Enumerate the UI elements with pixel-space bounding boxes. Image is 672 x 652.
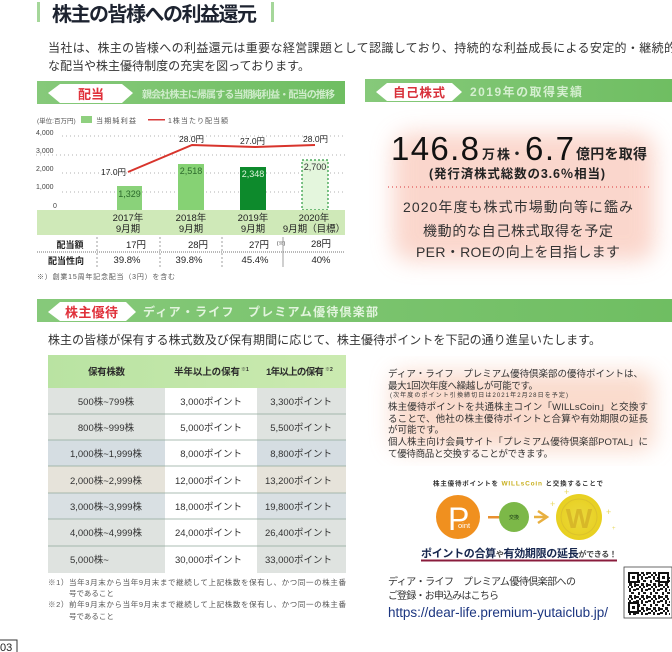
table rows: 3,000株~3,999株 bbox=[70, 501, 143, 513]
table rows: 5,000ポイント bbox=[180, 423, 242, 434]
table header: 保有株数 bbox=[88, 366, 125, 378]
panel: shareholder benefit header bbox=[37, 299, 672, 322]
icon: WILLs coin: W bbox=[566, 503, 593, 534]
headline figure: 億円を取得 bbox=[576, 146, 647, 162]
table rows: 45.4% bbox=[242, 255, 269, 266]
panel: treasury stock header: 2019年の取得実績 bbox=[470, 84, 582, 99]
table rows: 19,800ポイント bbox=[265, 502, 332, 513]
table rows: (※) bbox=[277, 241, 285, 247]
panel: shareholder benefit header: 株主優待 bbox=[65, 305, 118, 320]
table: dividend bbox=[37, 210, 345, 281]
benefit intro text: 株主の皆様が保有する株式数及び保有期間に応じて、株主優待ポイントを下記の通り進呈いたします。 bbox=[48, 332, 601, 347]
table header years: 9月期 bbox=[116, 224, 140, 235]
line value labels: 28.0円 bbox=[303, 134, 328, 144]
table rows: 3,300ポイント bbox=[270, 397, 332, 408]
chart legend: (単位:百万円) bbox=[37, 116, 76, 125]
treasury stock text: 2020年度も株式市場動向等に鑑み bbox=[403, 199, 633, 215]
panel: benefit notes: が可能です。 bbox=[388, 424, 444, 436]
table rows: 12,000ポイント bbox=[175, 476, 242, 487]
table rows: 28円 bbox=[188, 240, 208, 251]
panel: treasury stock header bbox=[365, 79, 672, 102]
table rows bbox=[48, 239, 331, 266]
table footnotes: ※1）当年3月末から当年9月末まで継続して上記株数を保有し、かつ同一の株主番 bbox=[48, 577, 346, 587]
table rows: 500株~799株 bbox=[78, 396, 135, 408]
table header bbox=[48, 355, 346, 388]
panel: benefit notes: ディア・ライフ プレミアム優待倶楽部の優待ポイントは、 bbox=[388, 368, 643, 380]
table rows: 3,000ポイント bbox=[180, 397, 242, 408]
headline figure: 万株 bbox=[482, 147, 510, 162]
headline note: (発行済株式総数の3.6％相当) bbox=[429, 166, 605, 181]
panel: dividend header: 親会社株主に帰属する当期純利益・配当の推移 bbox=[142, 88, 335, 101]
table header: ※1 bbox=[241, 367, 249, 373]
table rows: 5,500ポイント bbox=[270, 423, 332, 434]
chart axis labels: 2,000 bbox=[36, 166, 54, 173]
table rows bbox=[70, 396, 332, 566]
diagram caption: 株主優待ポイントを WILLsCoin と交換することで bbox=[433, 478, 604, 488]
table rows: 配当額 bbox=[56, 239, 84, 250]
table rows: 13,200ポイント bbox=[265, 476, 332, 487]
background blush bbox=[392, 372, 654, 450]
icon: orange point coin: P bbox=[448, 501, 469, 537]
chart axis labels: 1,000 bbox=[36, 184, 54, 191]
table rows: 800株~999株 bbox=[78, 422, 135, 434]
chart axis labels bbox=[36, 130, 57, 210]
panel: shareholder benefit header: ディア・ライフ プレミアム優待倶楽部 bbox=[143, 304, 378, 319]
line value labels: 17.0円 bbox=[101, 167, 126, 177]
table header: 半年以上の保有 bbox=[174, 366, 240, 378]
table rows: 2,000株~2,999株 bbox=[70, 475, 143, 487]
line value labels: 28.0円 bbox=[179, 134, 204, 144]
chart: dividend and net income bbox=[36, 116, 345, 210]
intro text bbox=[48, 40, 672, 73]
table rows: 30,000ポイント bbox=[175, 555, 242, 566]
intro text: な配当や株主優待制度の充実を図っております。 bbox=[48, 58, 310, 73]
bar 2017 bbox=[117, 186, 142, 210]
bar 2020 target bbox=[302, 160, 328, 210]
table rows: 4,000株~4,999株 bbox=[70, 527, 143, 539]
treasury stock text bbox=[403, 199, 633, 260]
chart legend: 1株当たり配当額 bbox=[168, 116, 228, 125]
table rows: 5,000株~ bbox=[70, 554, 109, 566]
table footnotes: 号であること bbox=[69, 612, 114, 621]
panel: benefit notes: ることで、他社の株主優待ポイントと合算や有効期限の延長 bbox=[388, 413, 648, 425]
panel: dividend header bbox=[37, 81, 345, 104]
bar 2019 bbox=[240, 167, 266, 210]
background blush bbox=[393, 133, 655, 261]
treasury stock text: PER・ROEの向上を目指します bbox=[416, 244, 620, 260]
table header: ※2 bbox=[325, 367, 333, 373]
table rows: 39.8% bbox=[176, 255, 203, 266]
table header years: 2020年 bbox=[299, 212, 330, 224]
panel: benefit notes: て優待商品と交換することができます。 bbox=[388, 448, 553, 460]
table rows: 33,000ポイント bbox=[265, 555, 332, 566]
icon: orange point coin bbox=[436, 495, 480, 539]
table footnotes: ※2）前年9月末から当年9月末まで継続して上記株数を保有し、かつ同一の株主番 bbox=[48, 599, 346, 609]
headline figure: ・ bbox=[510, 146, 524, 162]
table header years bbox=[37, 210, 345, 235]
table footnotes: 号であること bbox=[69, 589, 114, 598]
panel: treasury stock header: 自己株式 bbox=[393, 85, 445, 100]
table rows: 39.8% bbox=[114, 255, 141, 266]
line: dividend per share bbox=[128, 145, 315, 172]
table header years: 2019年 bbox=[238, 212, 269, 224]
icon: orange point coin: oint bbox=[458, 521, 471, 530]
panel: benefit notes: 個人株主向け会員サイト「プレミアム優待倶楽部POTAL」に bbox=[388, 436, 648, 448]
bar 2017: 1,329 bbox=[118, 189, 141, 199]
chart legend: 当期純利益 bbox=[96, 116, 136, 125]
table rows: 配当性向 bbox=[48, 255, 84, 266]
icon: QR code bbox=[624, 567, 672, 618]
table rows: 1,000株~1,999株 bbox=[70, 448, 143, 460]
icon: WILLs coin: + bbox=[550, 499, 555, 509]
bar 2020 target: 2,700 bbox=[304, 162, 326, 172]
table rows: 28円 bbox=[311, 239, 331, 250]
chart axis labels: 4,000 bbox=[36, 130, 54, 137]
table header years: 9月期（目標） bbox=[283, 223, 345, 235]
chart legend bbox=[37, 116, 228, 125]
table header years: 9月期 bbox=[179, 224, 203, 235]
title: 株主の皆様への利益還元 bbox=[52, 3, 257, 26]
diagram: point exchange bbox=[421, 478, 617, 562]
contact text: ご登録・お申込みはこちら bbox=[388, 589, 499, 602]
bar 2019: 2,348 bbox=[242, 169, 264, 179]
treasury stock text: 機動的な自己株式取得を予定 bbox=[423, 223, 613, 239]
table footnotes bbox=[48, 577, 346, 621]
icon: WILLs coin bbox=[550, 487, 616, 540]
bar 2018 bbox=[178, 164, 204, 210]
panel: treasury stock results bbox=[388, 130, 655, 261]
table rows: 26,400ポイント bbox=[265, 528, 332, 539]
chart axis labels: 0 bbox=[53, 203, 57, 210]
table header: 1年以上の保有 bbox=[266, 366, 324, 378]
panel: benefit notes: 株主優待ポイントを共通株主コイン「WILLsCoin」と交換す bbox=[388, 401, 648, 413]
panel: benefit notes bbox=[388, 368, 654, 460]
panel: benefit notes: (次年度のポイント引換締切日は2021年2月28日を予定) bbox=[390, 391, 568, 399]
line value labels: 27.0円 bbox=[240, 136, 265, 146]
icon: WILLs coin: + bbox=[564, 487, 569, 497]
arrow: exchange: 交換 bbox=[509, 514, 519, 521]
headline figure: 6.7 bbox=[525, 130, 574, 167]
chart axis labels: 3,000 bbox=[36, 148, 54, 155]
headline figure bbox=[391, 130, 647, 167]
table: benefit points bbox=[48, 355, 346, 573]
line value labels bbox=[101, 134, 328, 177]
table rows: 8,800ポイント bbox=[270, 449, 332, 460]
table rows: 24,000ポイント bbox=[175, 528, 242, 539]
dividend footnote: ※）創業15周年記念配当（3円）を含む bbox=[37, 272, 175, 281]
table header years: 2017年 bbox=[113, 212, 144, 224]
table rows: 17円 bbox=[126, 240, 146, 251]
table rows: 8,000ポイント bbox=[180, 449, 242, 460]
contact text bbox=[388, 575, 608, 620]
icon: WILLs coin: + bbox=[606, 507, 611, 517]
headline figure: 146.8 bbox=[391, 130, 479, 167]
table rows: 18,000ポイント bbox=[175, 502, 242, 513]
contact text: ディア・ライフ プレミアム優待倶楽部への bbox=[388, 575, 576, 588]
table header years: 2018年 bbox=[176, 212, 207, 224]
page number bbox=[0, 640, 17, 652]
table rows: 27円 bbox=[249, 240, 269, 251]
panel: benefit notes: 最大1回次年度へ繰越しが可能です。 bbox=[388, 380, 538, 392]
icon: WILLs coin: + bbox=[612, 526, 616, 532]
bar 2018: 2,518 bbox=[180, 166, 202, 176]
table header years: 9月期 bbox=[241, 224, 265, 235]
arrow: exchange bbox=[488, 502, 547, 532]
intro text: 当社は、株主の皆様への利益還元は重要な経営課題として認識しており、持続的な利益成長による安定的・継続的 bbox=[48, 40, 672, 55]
diagram message: ポイントの合算や有効期限の延長ができる！ bbox=[421, 546, 617, 560]
panel: dividend header: 配当 bbox=[78, 87, 104, 102]
table rows: 40% bbox=[311, 255, 331, 266]
contact text: https://dear-life.premium-yutaiclub.jp/ bbox=[388, 605, 608, 620]
